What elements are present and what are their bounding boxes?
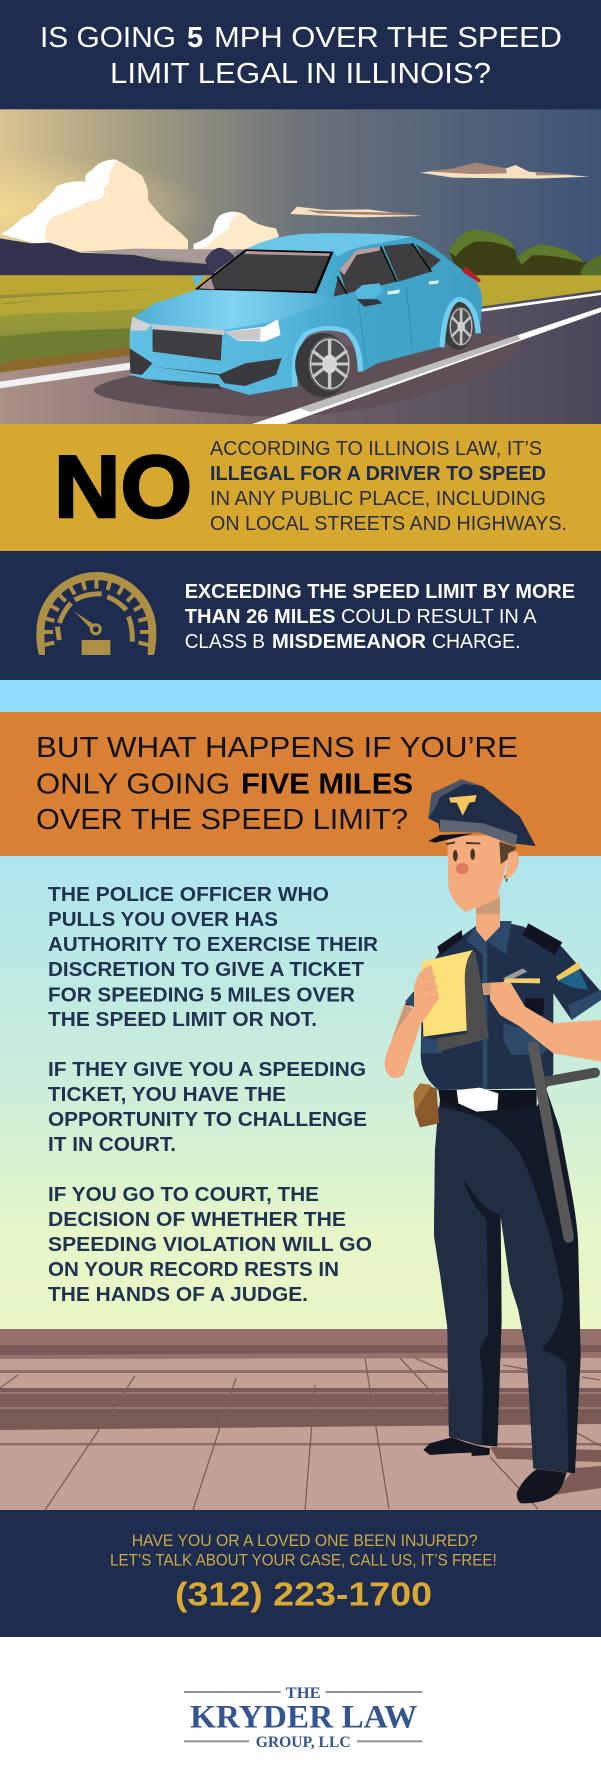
front wheel bbox=[295, 333, 351, 397]
car body bbox=[130, 233, 482, 395]
tree line bbox=[448, 229, 601, 275]
lane line bbox=[252, 307, 601, 424]
pen bbox=[482, 968, 540, 995]
paragraph: judge decides: DECISION OF WHETHER THE bbox=[48, 1209, 346, 1231]
hood bbox=[132, 290, 333, 330]
paragraph: challenge in court: TICKET, YOU HAVE THE bbox=[48, 1084, 286, 1106]
paragraph: officer discretion: PULLS YOU OVER HAS bbox=[48, 909, 278, 931]
header: title: MPH OVER THE SPEED bbox=[214, 22, 562, 54]
sky bbox=[0, 109, 601, 276]
paragraph: judge decides bbox=[48, 1184, 372, 1306]
paragraph: challenge in court bbox=[48, 1059, 367, 1156]
mirrors bbox=[192, 275, 383, 307]
holster bbox=[413, 1083, 439, 1127]
pockets bbox=[503, 1023, 553, 1055]
panel: orange question heading: ONLY GOING bbox=[36, 768, 230, 800]
nose bbox=[456, 863, 469, 874]
fact text: COULD RESULT IN A bbox=[341, 605, 537, 628]
right arm bbox=[490, 982, 601, 1062]
illustration: police officer bbox=[385, 779, 601, 1503]
body text bbox=[48, 884, 379, 1306]
paragraph: judge decides: ON YOUR RECORD RESTS IN bbox=[48, 1259, 339, 1281]
panel: orange question heading: BUT WHAT HAPPENS IF YOU’RE bbox=[36, 732, 518, 764]
panel: call to action: LET’S TALK ABOUT YOUR CASE, CALL US, IT’S FREE! bbox=[110, 1550, 497, 1569]
fact text: MISDEMEANOR bbox=[272, 630, 426, 653]
header: title bbox=[0, 0, 601, 110]
paragraph: officer discretion: THE SPEED LIMIT OR NOT. bbox=[48, 1009, 317, 1031]
trousers bbox=[434, 1090, 581, 1473]
light blue divider band bbox=[0, 680, 601, 712]
paragraph: judge decides: IF YOU GO TO COURT, THE bbox=[48, 1184, 319, 1206]
fact text: THAN 26 MILES bbox=[185, 605, 335, 628]
distant clouds bbox=[290, 163, 590, 217]
paragraph: challenge in court: IF THEY GIVE YOU A SPEEDING bbox=[48, 1059, 366, 1081]
panel: call to action bbox=[0, 1510, 601, 1637]
fact text: EXCEEDING THE SPEED LIMIT BY MORE bbox=[185, 580, 575, 603]
logo: The Kryder Law Group: KRYDER LAW bbox=[190, 1700, 417, 1736]
header: title: IS GOING bbox=[40, 22, 176, 54]
paragraph: officer discretion: THE POLICE OFFICER WHO bbox=[48, 884, 329, 906]
fact text: CLASS B bbox=[185, 630, 265, 653]
rear wheel bbox=[442, 300, 474, 350]
police cap bbox=[428, 779, 536, 846]
panel: NO answer bbox=[0, 424, 601, 551]
left hand bbox=[414, 965, 439, 1023]
header: title: LIMIT LEGAL IN ILLINOIS? bbox=[110, 58, 491, 90]
side windows bbox=[333, 243, 441, 297]
shirt bbox=[405, 921, 601, 1090]
paragraph: judge decides: SPEEDING VIOLATION WILL GO bbox=[48, 1234, 372, 1256]
road edge lines bbox=[0, 292, 601, 388]
notepad bbox=[422, 950, 489, 1052]
paragraph: officer discretion: FOR SPEEDING 5 MILES OVER bbox=[48, 984, 356, 1006]
placket bbox=[483, 943, 487, 1089]
eyebrows bbox=[446, 841, 481, 845]
left arm bbox=[385, 1002, 423, 1078]
logo: The Kryder Law Group: THE bbox=[286, 1685, 321, 1702]
paragraph: officer discretion: AUTHORITY TO EXERCISE THEIR bbox=[48, 934, 379, 956]
neck bbox=[476, 893, 500, 942]
paragraph: officer discretion: DISCRETION TO GIVE A TICKET bbox=[48, 959, 364, 981]
header: title: 5 bbox=[187, 22, 203, 54]
lower air intakes bbox=[130, 348, 282, 389]
field bbox=[0, 275, 601, 375]
icon: speedometer bbox=[36, 572, 156, 655]
illustration: car on the road bbox=[0, 109, 601, 424]
headlights bbox=[130, 317, 281, 342]
panel: orange question heading: FIVE MILES bbox=[241, 768, 413, 800]
logo: The Kryder Law Group bbox=[184, 1685, 422, 1751]
big NO: NO bbox=[54, 437, 192, 536]
head bbox=[446, 835, 519, 912]
eyes bbox=[453, 850, 458, 861]
mountains bbox=[0, 238, 238, 275]
wheel arches bbox=[294, 299, 478, 387]
fact text: CHARGE. bbox=[432, 630, 520, 653]
paragraph: judge decides: THE HANDS OF A JUDGE. bbox=[48, 1284, 308, 1306]
paragraph: challenge in court: IT IN COURT. bbox=[48, 1134, 176, 1156]
collar bbox=[467, 921, 512, 957]
windscreen bbox=[195, 249, 333, 293]
panel: call to action: HAVE YOU OR A LOVED ONE BEEN INJURED? bbox=[132, 1531, 478, 1550]
roof highlight bbox=[245, 233, 412, 257]
tail light bbox=[462, 267, 481, 283]
sleeve cuff bbox=[568, 990, 601, 1020]
legal explanation: ACCORDING TO ILLINOIS LAW, IT’S bbox=[210, 437, 542, 460]
road bbox=[0, 290, 601, 424]
shoes bbox=[423, 1437, 567, 1503]
paragraph: challenge in court: OPPORTUNITY TO CHALLENGE bbox=[48, 1109, 367, 1131]
paragraph: officer discretion bbox=[48, 884, 379, 1031]
legal explanation bbox=[210, 437, 567, 535]
ear bbox=[505, 851, 519, 880]
floor tiles bbox=[0, 1329, 601, 1510]
gradient background bbox=[0, 856, 601, 1330]
grille bbox=[151, 324, 224, 361]
epaulettes bbox=[437, 923, 562, 955]
logo: The Kryder Law Group: GROUP, LLC bbox=[256, 1734, 351, 1751]
panel: misdemeanor fact bbox=[0, 551, 601, 680]
legal explanation: ILLEGAL FOR A DRIVER TO SPEED bbox=[210, 462, 546, 485]
phone number: (312) 223-1700 bbox=[175, 1576, 432, 1613]
legal explanation: IN ANY PUBLIC PLACE, INCLUDING bbox=[210, 487, 546, 510]
door details bbox=[358, 280, 439, 363]
hair bbox=[499, 842, 517, 883]
baton bbox=[533, 1047, 595, 1237]
sleeve patch bbox=[557, 967, 588, 990]
fact text bbox=[185, 580, 575, 653]
small cloud bbox=[194, 212, 279, 249]
panel: orange question heading: OVER THE SPEED LIMIT? bbox=[36, 804, 408, 836]
car shadow bbox=[94, 335, 521, 416]
legal explanation: ON LOCAL STREETS AND HIGHWAYS. bbox=[210, 512, 567, 535]
large cloud bbox=[1, 159, 188, 253]
belt bbox=[438, 1090, 537, 1110]
panel: orange question heading bbox=[0, 712, 601, 856]
